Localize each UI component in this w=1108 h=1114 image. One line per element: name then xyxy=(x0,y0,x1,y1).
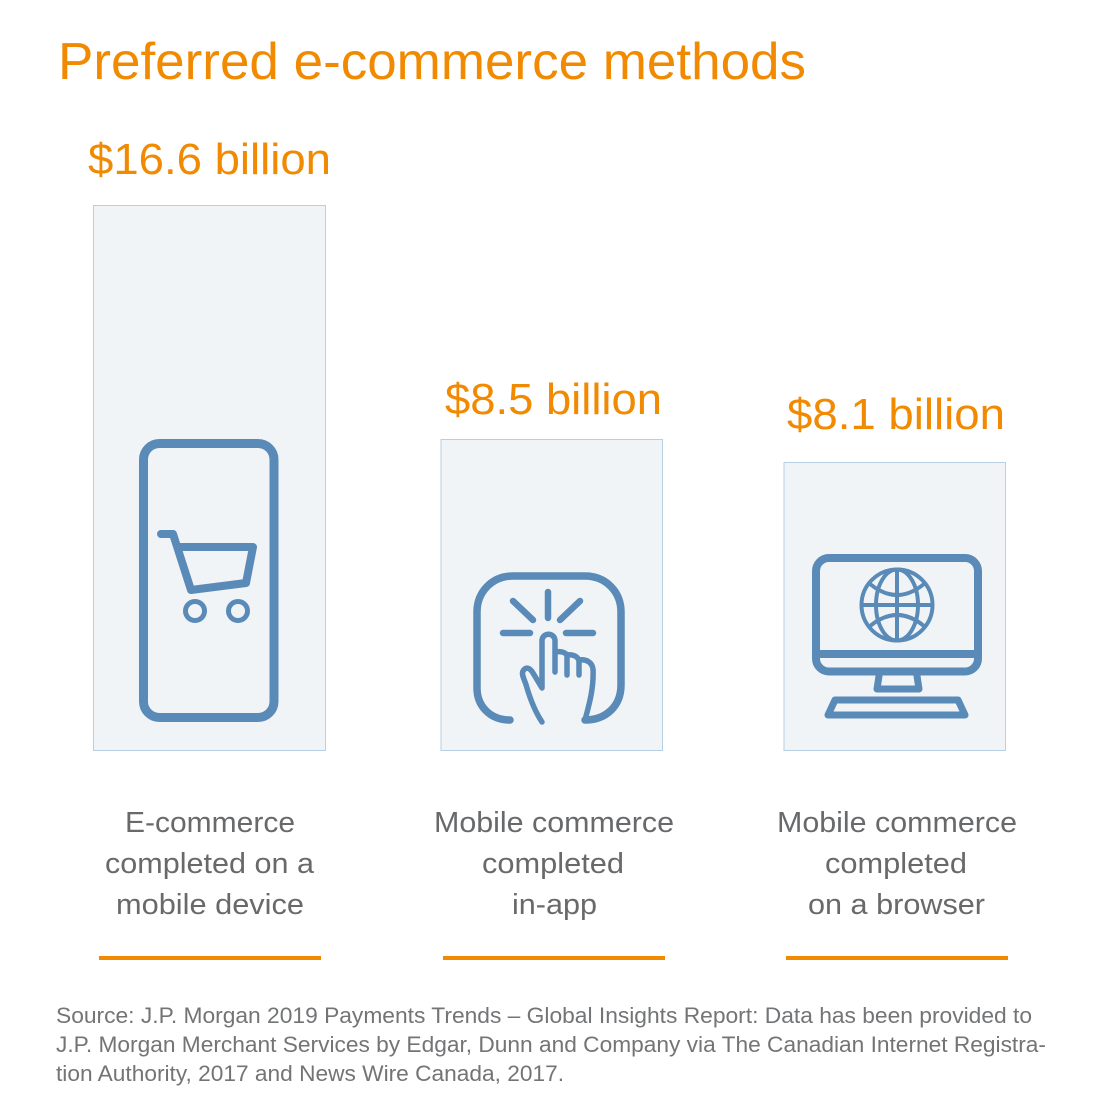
label: mobile commerce completed on a browser xyxy=(777,807,1017,921)
value: $8.5 billion: $8.5 billion xyxy=(445,375,662,424)
underline xyxy=(99,956,321,960)
bar: $16.6 billion xyxy=(94,206,326,750)
panel: mobile commerce in-app xyxy=(434,375,674,960)
label: mobile commerce completed in-app: Mobile commerce xyxy=(434,807,674,839)
icon: phone with shopping cart xyxy=(144,444,274,718)
underline xyxy=(443,956,665,960)
label: e-commerce completed on a mobile device: E-commerce xyxy=(125,807,295,839)
value: $8.1 billion: $8.1 billion xyxy=(787,390,1005,439)
title: Preferred e-commerce methods xyxy=(58,33,806,91)
label: mobile commerce completed on a browser: completed xyxy=(825,848,967,880)
label: mobile commerce completed in-app: in-app xyxy=(512,889,597,921)
source text block: Source: J.P. Morgan 2019 Payments Trends – Global Insights Report: Data has been provided to xyxy=(56,1003,1032,1028)
source text block: J.P. Morgan Merchant Services by Edgar, Dunn and Company via The Canadian Internet Registra- xyxy=(56,1032,1046,1057)
label: mobile commerce completed in-app: completed xyxy=(482,848,624,880)
underline xyxy=(786,956,1008,960)
source text block xyxy=(56,1003,1046,1086)
panel: e-commerce on a mobile device xyxy=(88,135,331,960)
bar: $8.1 billion xyxy=(784,462,1006,750)
label: e-commerce completed on a mobile device: mobile device xyxy=(116,889,304,921)
label: mobile commerce completed in-app xyxy=(434,807,674,921)
icon: desktop computer with globe xyxy=(816,558,978,715)
source text block: tion Authority, 2017 and News Wire Canada, 2017. xyxy=(56,1061,564,1086)
label: mobile commerce completed on a browser: Mobile commerce xyxy=(777,807,1017,839)
label: mobile commerce completed on a browser: on a browser xyxy=(808,889,985,921)
icon: tapping hand in rounded square xyxy=(477,576,621,722)
value: $16.6 billion: $16.6 billion xyxy=(88,135,331,184)
bar: $8.5 billion xyxy=(441,440,662,750)
label: e-commerce completed on a mobile device: completed on a xyxy=(105,848,315,880)
label: e-commerce completed on a mobile device xyxy=(105,807,315,921)
panel: mobile commerce on a browser xyxy=(777,390,1017,960)
